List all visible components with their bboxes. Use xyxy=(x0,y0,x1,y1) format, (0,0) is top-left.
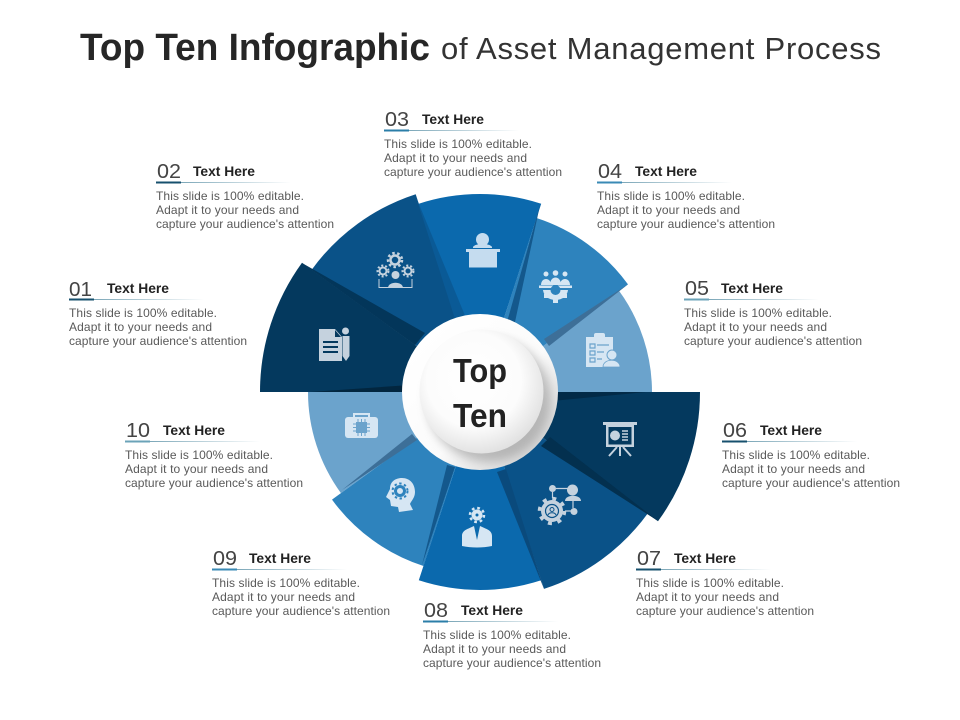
callout 03 xyxy=(384,109,562,179)
callout 01 xyxy=(69,279,247,348)
callout 08: Text Here xyxy=(461,603,523,618)
segment 05 xyxy=(480,291,652,392)
segment 04 xyxy=(480,218,628,392)
segment 07 xyxy=(480,392,648,589)
segment 09 xyxy=(332,392,480,566)
callout 01: This slide is 100% editable. xyxy=(69,306,217,320)
callout 07: This slide is 100% editable. xyxy=(636,576,784,590)
callout 09: 09 xyxy=(213,548,237,570)
callout 04: Adapt it to your needs and xyxy=(597,203,740,217)
icon: clipboard and person xyxy=(586,333,620,367)
callout 06: Adapt it to your needs and xyxy=(722,462,865,476)
callout 10: Text Here xyxy=(163,423,225,438)
callout 04 xyxy=(597,161,775,231)
callout 03: 03 xyxy=(385,109,409,131)
callout 01: capture your audience's attention xyxy=(69,334,247,348)
callout 10 xyxy=(125,420,303,490)
wedge shadows xyxy=(302,197,658,589)
callout 01: Adapt it to your needs and xyxy=(69,320,212,334)
circular chart: ten wedges xyxy=(260,194,700,590)
callout 05: capture your audience's attention xyxy=(684,334,862,348)
callout 10: Adapt it to your needs and xyxy=(125,462,268,476)
center sphere xyxy=(402,314,558,470)
callout 04: Text Here xyxy=(635,164,697,179)
callout 02: Text Here xyxy=(193,164,255,179)
callout 07: Text Here xyxy=(674,551,736,566)
segment 01 xyxy=(260,263,480,392)
center label: Top xyxy=(453,352,507,389)
icon: gears over person xyxy=(378,253,414,288)
callout 08: 08 xyxy=(424,600,448,622)
callout 07: 07 xyxy=(637,548,661,570)
callout 09: Text Here xyxy=(249,551,311,566)
callout 07 xyxy=(636,548,814,618)
icon: presentation board xyxy=(603,422,637,456)
callout 03: Text Here xyxy=(422,112,484,127)
segment 08 xyxy=(419,392,541,590)
callout 03: capture your audience's attention xyxy=(384,165,562,179)
callout 04: 04 xyxy=(598,161,622,183)
callout 02: This slide is 100% editable. xyxy=(156,189,304,203)
callout 02: capture your audience's attention xyxy=(156,217,334,231)
callout 02 xyxy=(156,161,334,231)
callout 05: Text Here xyxy=(721,281,783,296)
callout 04: capture your audience's attention xyxy=(597,217,775,231)
center label xyxy=(453,352,507,434)
callout 10: 10 xyxy=(126,420,150,442)
callout 09: This slide is 100% editable. xyxy=(212,576,360,590)
segment 03 xyxy=(419,194,541,392)
callout 08 xyxy=(423,600,601,670)
callout 07: Adapt it to your needs and xyxy=(636,590,779,604)
callout 10: This slide is 100% editable. xyxy=(125,448,273,462)
callout 08: Adapt it to your needs and xyxy=(423,642,566,656)
callout 06: 06 xyxy=(723,420,747,442)
icon: document and pencil xyxy=(319,328,350,361)
callout 08: capture your audience's attention xyxy=(423,656,601,670)
title: of Asset Management Process xyxy=(441,31,881,66)
callout 06: Text Here xyxy=(760,423,822,438)
callout 01: 01 xyxy=(69,279,92,301)
center label: Ten xyxy=(453,397,507,434)
callout 10: capture your audience's attention xyxy=(125,476,303,490)
callout 05 xyxy=(684,278,862,348)
callout 06: capture your audience's attention xyxy=(722,476,900,490)
title: Top Ten Infographic xyxy=(80,27,430,69)
icon: gear network xyxy=(540,484,581,524)
callout 03: Adapt it to your needs and xyxy=(384,151,527,165)
callout 06 xyxy=(722,420,900,490)
callout 03: This slide is 100% editable. xyxy=(384,137,532,151)
callout 09: capture your audience's attention xyxy=(212,604,390,618)
callout 02: Adapt it to your needs and xyxy=(156,203,299,217)
callout 05: Adapt it to your needs and xyxy=(684,320,827,334)
callout 07: capture your audience's attention xyxy=(636,604,814,618)
callout 01: Text Here xyxy=(107,281,169,296)
icon: businessman with gear head xyxy=(462,508,492,548)
callout 08: This slide is 100% editable. xyxy=(423,628,571,642)
callout 02: 02 xyxy=(157,161,181,183)
icon: briefcase with chip xyxy=(345,414,378,438)
segment 10 xyxy=(308,392,480,493)
callout 09 xyxy=(212,548,390,618)
callout 05: This slide is 100% editable. xyxy=(684,306,832,320)
segment 06 xyxy=(480,392,700,521)
segment 02 xyxy=(312,194,480,392)
callout 09: Adapt it to your needs and xyxy=(212,590,355,604)
icon: team on gear xyxy=(539,270,572,303)
callout 06: This slide is 100% editable. xyxy=(722,448,870,462)
title xyxy=(80,27,881,69)
callout 05: 05 xyxy=(685,278,709,300)
callout 04: This slide is 100% editable. xyxy=(597,189,745,203)
icon: head with gear xyxy=(386,478,415,512)
icon: speaker at lectern xyxy=(466,233,500,268)
